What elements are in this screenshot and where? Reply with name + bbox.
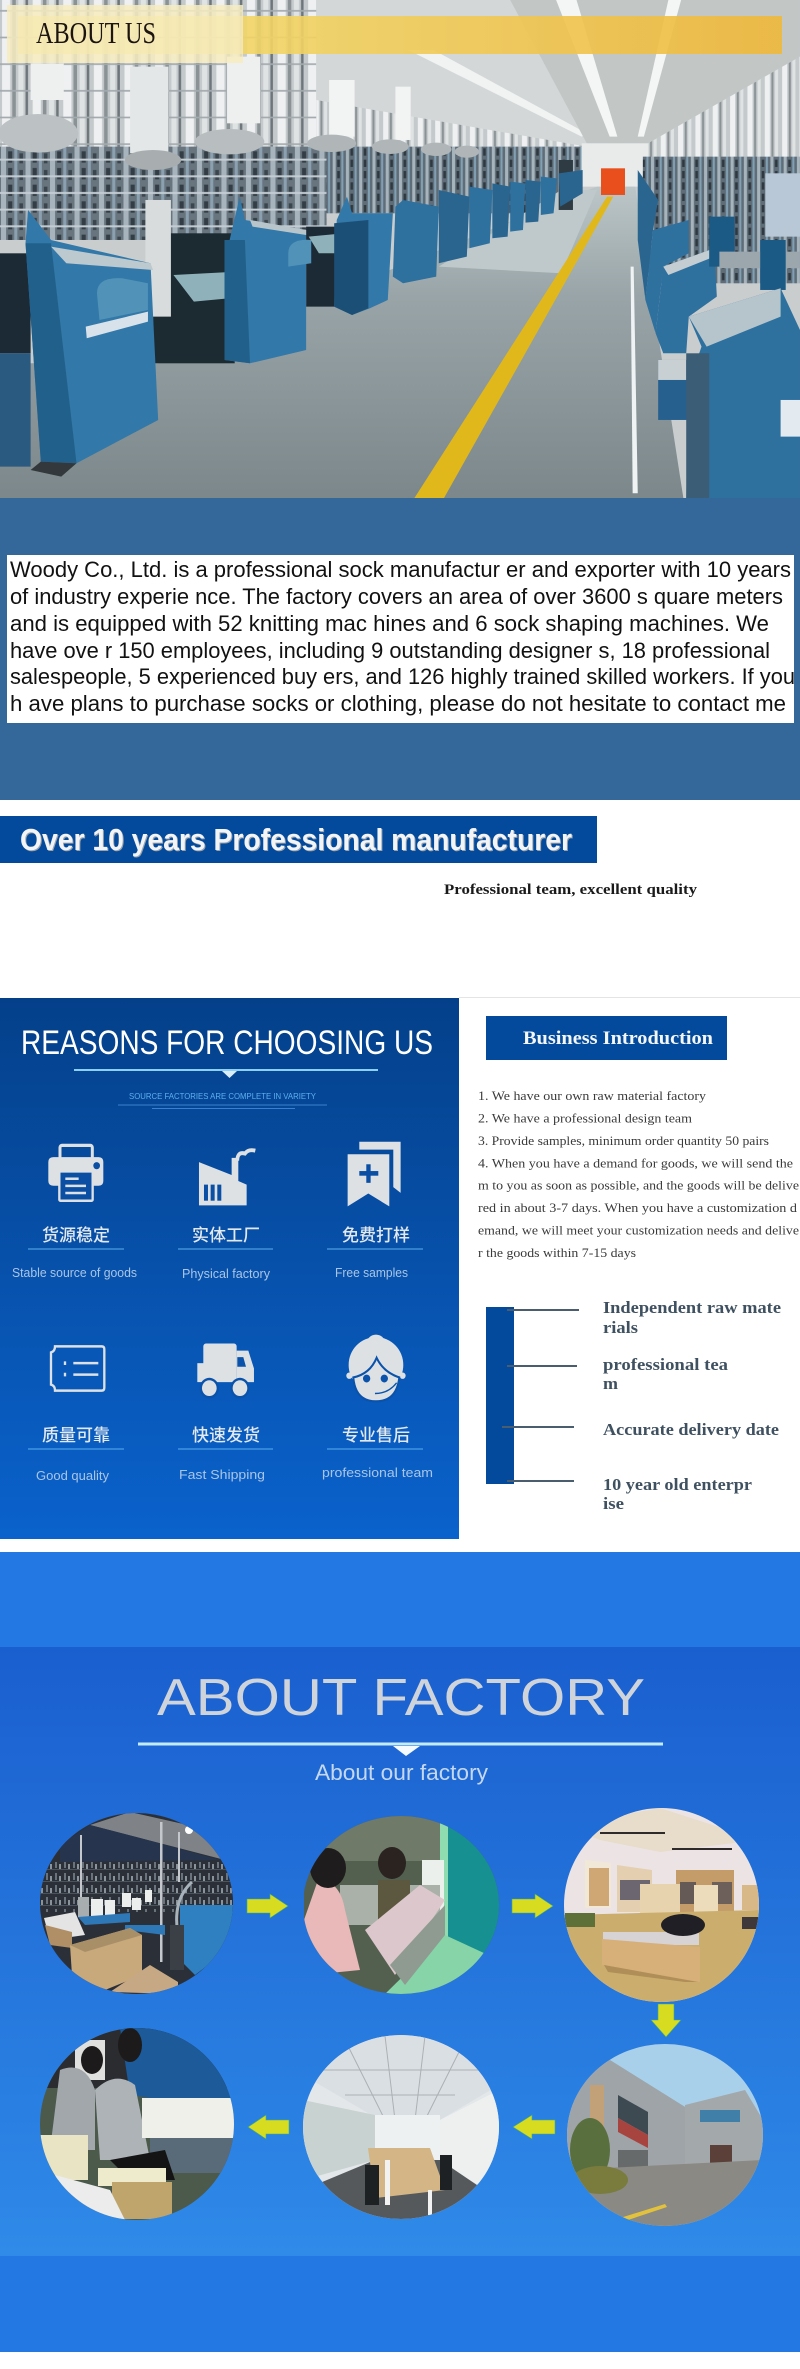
- feature: good quality: 质量可靠: [42, 1426, 110, 1445]
- feature: free samples: Free samples: [335, 1266, 408, 1280]
- text block: numbered list: m to you as soon as possible, and the goods will be delive: [478, 1178, 799, 1192]
- text block: numbered list: 2. We have a professional design team: [478, 1110, 692, 1126]
- text block: numbered list: 1. We have our own raw material factory: [478, 1088, 707, 1103]
- photo: packing workers: [40, 2028, 237, 2220]
- heading: reasons: REASONS FOR CHOOSING US: [21, 1024, 433, 1062]
- heading: over 10 years: Over 10 years Professional manufacturer: [20, 822, 572, 857]
- feature labels: m: [603, 1374, 618, 1393]
- heading: over 10 years: Over 10 years Professional manufacturer: [21, 823, 573, 858]
- text block: company description: [10, 557, 795, 716]
- panel: company intro: [0, 498, 800, 800]
- photo: office: [303, 2035, 499, 2219]
- feature labels: 10 year old enterpr: [603, 1475, 752, 1494]
- text block: numbered list: r the goods within 7-15 days: [478, 1245, 636, 1260]
- text block: numbered list: red in about 3-7 days. When you have a customization d: [478, 1200, 798, 1215]
- photo: sock shaping workers: [304, 1816, 499, 1994]
- heading: business introduction: Business Introduction: [523, 1028, 713, 1049]
- feature: good quality: [28, 1426, 124, 1483]
- text block: company description: and is equipped with 52 knitting mac hines and 6 sock shaping machines. We: [10, 611, 769, 636]
- feature labels: Independent raw mate: [603, 1298, 781, 1317]
- feature labels: professional tea: [603, 1355, 729, 1374]
- panel: about factory: [0, 1552, 800, 2352]
- photo: factory building: [567, 2044, 763, 2226]
- photo: knitting workshop: [40, 1812, 234, 1996]
- photo: showroom: [563, 1807, 762, 2005]
- icons: [48, 1142, 406, 1401]
- text block: numbered list: [478, 1088, 799, 1260]
- feature: good quality: Good quality: [36, 1469, 110, 1483]
- heading: over 10 years: [0, 816, 597, 863]
- panel: reasons for choosing us: [0, 998, 459, 1539]
- heading: about factory: ABOUT FACTORY: [157, 1669, 645, 1727]
- heading: business introduction: [486, 1016, 727, 1060]
- text block: company description: salespeople, 5 experienced buy ers, and 126 highly trained skilled workers. If you: [10, 664, 795, 689]
- banner: about us: [7, 5, 782, 63]
- feature: stable source: [12, 1225, 137, 1280]
- feature labels: rials: [603, 1318, 638, 1337]
- feature: fast shipping: Fast Shipping: [179, 1468, 265, 1482]
- icon: printer: [48, 1145, 103, 1201]
- diagram: feature bar with ticks: [486, 1307, 579, 1484]
- feature: fast shipping: [178, 1426, 273, 1482]
- feature: professional team: 专业售后: [342, 1426, 410, 1445]
- icon: customer service face: [346, 1335, 406, 1401]
- feature: physical factory: [178, 1225, 273, 1281]
- arrow: [512, 1894, 553, 1918]
- panel: business introduction: [478, 1016, 799, 1513]
- divider with pointer: [74, 1069, 378, 1078]
- feature: professional team: professional team: [322, 1466, 433, 1480]
- heading: about us: ABOUT US: [36, 15, 156, 50]
- feature: stable source: 货源稳定: [42, 1225, 110, 1245]
- text block: numbered list: 3. Provide samples, minimum order quantity 50 pairs: [478, 1133, 769, 1148]
- tagline: SOURCE FACTORIES ARE COMPLETE IN VARIETY: [129, 1091, 316, 1101]
- feature labels: Accurate delivery date: [603, 1420, 779, 1439]
- icon: bookmark: [348, 1142, 401, 1206]
- factory floor photo: [0, 0, 800, 500]
- feature: fast shipping: 快速发货: [192, 1426, 260, 1445]
- arrow: [248, 2115, 289, 2139]
- feature: stable source: Stable source of goods: [12, 1266, 137, 1280]
- feature labels: [603, 1298, 781, 1513]
- icon: factory: [199, 1150, 255, 1205]
- text block: numbered list: 4. When you have a demand for goods, we will send the: [478, 1156, 793, 1170]
- feature: free samples: [327, 1226, 423, 1280]
- text block: company description: h ave plans to purchase socks or clothing, please do not hesitate to contact me: [10, 691, 786, 716]
- feature: free samples: 免费打样: [342, 1226, 410, 1245]
- feature: physical factory: Physical factory: [182, 1267, 271, 1281]
- feature: physical factory: 实体工厂: [192, 1225, 260, 1245]
- feature labels: ise: [603, 1494, 624, 1513]
- text block: company description: have ove r 150 employees, including 9 outstanding designer s, 18 professional: [10, 638, 770, 663]
- text block: numbered list: emand, we will meet your customization needs and delive: [478, 1222, 799, 1238]
- text block: company description: of industry experie nce. The factory covers an area of over 3600 s quare meters: [10, 584, 783, 609]
- subheading: About our factory: [315, 1760, 488, 1785]
- feature: professional team: [322, 1426, 433, 1480]
- icon: truck: [197, 1344, 254, 1399]
- divider with pointer: [138, 1742, 663, 1756]
- arrow: [651, 2004, 681, 2037]
- text block: company description: Woody Co., Ltd. is a professional sock manufactur er and exporter with 10 years: [10, 557, 791, 582]
- arrow: [513, 2115, 555, 2139]
- icon: ticket list: [51, 1346, 104, 1391]
- arrow: [247, 1894, 288, 1918]
- subtitle: Professional team, excellent quality: [444, 882, 698, 898]
